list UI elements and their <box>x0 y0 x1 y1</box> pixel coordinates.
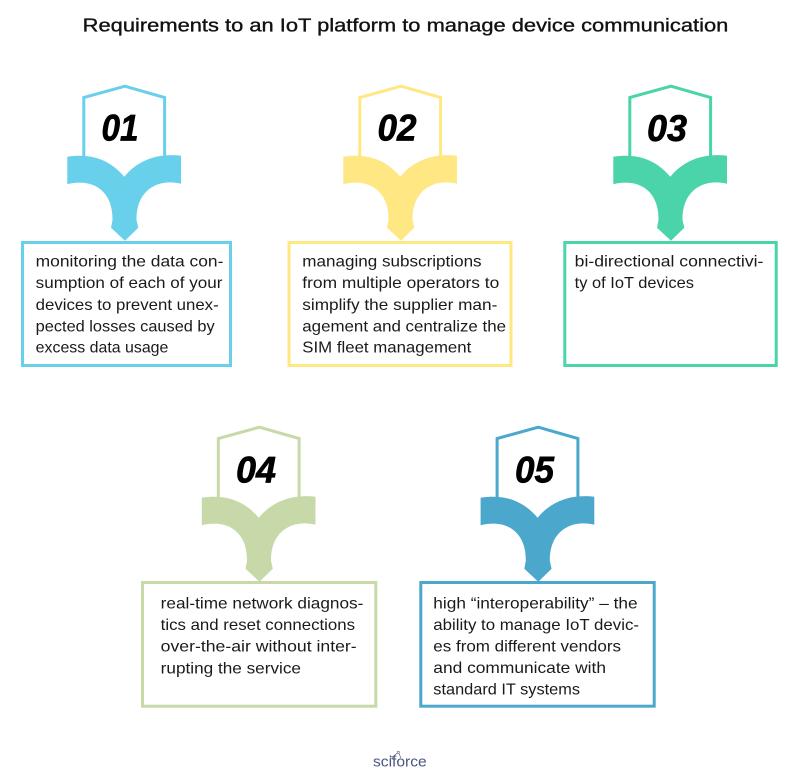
number 01: 01 <box>102 108 138 149</box>
text box 04: tics and reset connections <box>161 617 355 634</box>
icon: forked arrow 04 <box>202 496 316 582</box>
text box 01: sumption of each of your <box>36 275 222 292</box>
text box 05: es from different vendors <box>433 639 621 656</box>
text box 02: agement and centralize the <box>302 318 506 335</box>
text box 04: rupting the service <box>161 660 301 677</box>
icon: forked arrow 01 <box>67 155 181 241</box>
panel: requirement 05 <box>421 427 654 706</box>
icon: forked arrow 03 <box>613 155 727 241</box>
panel: requirement 02 <box>289 86 511 365</box>
text box 04 <box>142 582 376 706</box>
text box 01: devices to prevent unex- <box>36 297 219 314</box>
panel: requirement 04 <box>142 427 376 706</box>
text box 03: ty of IoT devices <box>575 275 694 292</box>
text box 05: and communicate with <box>433 660 606 677</box>
text box 05: ability to manage IoT devic- <box>433 617 639 634</box>
text box 05: standard IT systems <box>433 681 580 698</box>
title: Requirements to an IoT platform to manage device communication <box>83 14 728 35</box>
logo: sciforce: sciforce <box>373 755 427 771</box>
number 02: 02 <box>378 108 417 149</box>
number 03: 03 <box>647 108 687 149</box>
panel: requirement 01 <box>22 86 230 365</box>
text box 01: monitoring the data con- <box>36 254 223 271</box>
text box 04: over-the-air without inter- <box>161 639 357 656</box>
text box 03 <box>565 242 776 366</box>
text box 02 <box>289 242 511 366</box>
text box 02: from multiple operators to <box>302 275 500 292</box>
icon: pentagon badge 05 <box>481 427 594 582</box>
icon: pentagon badge 02 <box>343 86 457 241</box>
icon: pentagon badge 01 <box>67 86 181 241</box>
text box 03: bi-directional connectivi- <box>575 254 763 271</box>
icon: pentagon badge 04 <box>202 427 316 582</box>
text box 04: real-time network diagnos- <box>161 595 363 612</box>
number 04: 04 <box>236 450 276 491</box>
number 05: 05 <box>515 450 555 491</box>
icon: pentagon badge 03 <box>613 86 727 241</box>
text box 02: simplify the supplier man- <box>302 297 497 314</box>
panel: requirement 03 <box>565 86 776 365</box>
text box 01: excess data usage <box>36 340 168 357</box>
text box 05: high “interoperability” – the <box>433 595 638 612</box>
text box 01: pected losses caused by <box>36 318 215 335</box>
text box 01 <box>22 242 230 366</box>
text box 02: managing subscriptions <box>302 254 482 271</box>
text box 02: SIM fleet management <box>302 340 472 357</box>
icon: forked arrow 02 <box>343 155 457 241</box>
icon: forked arrow 05 <box>481 496 594 582</box>
text box 05 <box>421 582 654 706</box>
